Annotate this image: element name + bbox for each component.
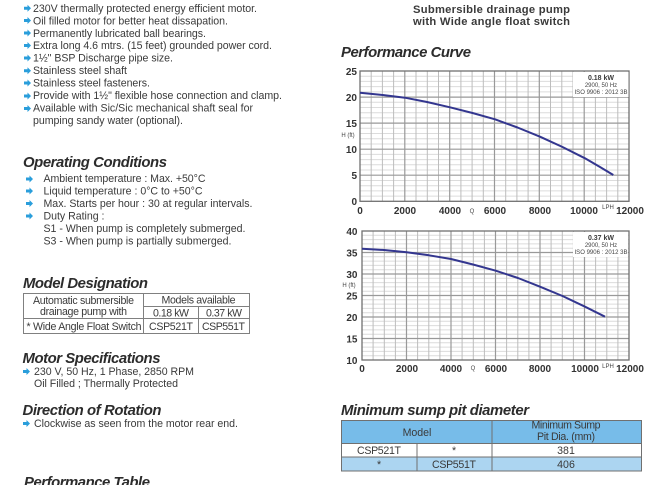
chart: 0.37 kW performance curve: 30 bbox=[346, 270, 358, 281]
chart: 0.18 kW performance curve: 2000 bbox=[394, 206, 417, 217]
feature list: Stainless steel shaft bbox=[33, 65, 127, 77]
minimum sump pit table: * bbox=[377, 459, 381, 471]
operating conditions list: Max. Starts per hour : 30 at regular intervals. bbox=[44, 198, 252, 210]
chart: 0.37 kW performance curve: 20 bbox=[346, 313, 358, 324]
model designation table: CSP551T bbox=[202, 321, 246, 333]
chart: 0.37 kW performance curve: 12000 bbox=[616, 364, 644, 375]
heading: minimum sump pit diameter: Minimum sump pit diameter bbox=[341, 403, 530, 419]
rating box: ISO 9906 : 2012 3B bbox=[574, 90, 628, 96]
direction of rotation text: Clockwise as seen from the motor rear end. bbox=[34, 418, 238, 430]
chart: 0.37 kW performance curve: 25 bbox=[346, 292, 358, 302]
operating conditions list bbox=[26, 173, 252, 248]
chart: 0.18 kW performance curve: 12000 bbox=[616, 206, 644, 217]
feature list: Permanently lubricated ball bearings. bbox=[33, 28, 206, 40]
chart: 0.18 kW performance curve bbox=[341, 67, 644, 217]
chart: 0.37 kW performance curve: 2000 bbox=[396, 364, 419, 375]
chart: 0.18 kW performance curve: 20 bbox=[346, 93, 357, 104]
minimum sump pit table: 406 bbox=[557, 459, 575, 471]
feature list: Available with Sic/Sic mechanical shaft seal for bbox=[33, 102, 253, 114]
chart: 0.18 kW performance curve: 10 bbox=[346, 145, 357, 156]
feature list: 230V thermally protected energy efficient motor. bbox=[33, 3, 257, 15]
model designation table: Models available bbox=[162, 294, 236, 306]
heading: performance curve: Performance Curve bbox=[341, 45, 471, 61]
chart: 0.37 kW performance curve bbox=[342, 227, 644, 375]
chart: 0.37 kW performance curve: 8000 bbox=[529, 364, 552, 375]
rating box: 2900, 50 Hz bbox=[585, 83, 617, 89]
minimum sump pit table: Model bbox=[403, 427, 431, 439]
feature list: Stainless steel fasteners. bbox=[33, 78, 150, 90]
chart: 0.37 kW performance curve: 0 bbox=[359, 364, 365, 375]
operating conditions list: S3 - When pump is partially submerged. bbox=[44, 236, 232, 248]
rating box: 2900, 50 Hz bbox=[585, 243, 617, 249]
operating conditions list: Liquid temperature : 0°C to +50°C bbox=[44, 186, 203, 198]
performance line bbox=[362, 249, 605, 317]
chart: 0.18 kW performance curve: 4000 bbox=[439, 206, 462, 217]
model designation table: Automatic submersible bbox=[33, 295, 134, 307]
feature list: Extra long 4.6 mtrs. (15 feet) grounded power cord. bbox=[33, 40, 272, 52]
chart: 0.18 kW performance curve: 0 bbox=[357, 206, 363, 217]
heading: direction of rotation: Direction of Rotation bbox=[22, 403, 162, 419]
operating conditions list: Duty Rating : bbox=[44, 210, 104, 222]
minimum sump pit table: Minimum Sump bbox=[532, 420, 601, 432]
chart: 0.18 kW performance curve: LPH bbox=[602, 205, 614, 211]
chart: 0.37 kW performance curve: 40 bbox=[346, 227, 358, 238]
chart: 0.37 kW performance curve: 10 bbox=[346, 356, 358, 367]
model designation table: 0.37 kW bbox=[206, 308, 242, 320]
chart: 0.18 kW performance curve: 8000 bbox=[529, 206, 552, 217]
model designation table: 0.18 kW bbox=[153, 308, 189, 320]
model designation table: CSP521T bbox=[149, 321, 194, 333]
chart: 0.18 kW performance curve: H (ft) bbox=[341, 133, 355, 139]
chart: 0.37 kW performance curve: H (ft) bbox=[342, 283, 356, 289]
heading: motor specifications: Motor Specifications bbox=[22, 351, 160, 367]
operating conditions list: Ambient temperature : Max. +50°C bbox=[44, 173, 206, 185]
feature list: pumping sandy water (optional). bbox=[33, 115, 183, 127]
model designation table bbox=[24, 294, 250, 334]
minimum sump pit table: 381 bbox=[557, 445, 575, 457]
rating box: 0.18 kW bbox=[588, 75, 614, 82]
chart: 0.18 kW performance curve: 6000 bbox=[484, 206, 507, 217]
rating box: 0.37 kW bbox=[588, 235, 614, 242]
chart: 0.37 kW performance curve: 4000 bbox=[440, 364, 463, 375]
chart: 0.37 kW performance curve: 6000 bbox=[485, 364, 508, 375]
minimum sump pit table bbox=[341, 420, 642, 471]
feature list: 1½" BSP Discharge pipe size. bbox=[33, 53, 173, 65]
performance line bbox=[360, 93, 613, 175]
motor specifications text: 230 V, 50 Hz, 1 Phase, 2850 RPM bbox=[34, 366, 194, 378]
feature list: Provide with 1½" flexible hose connection and clamp. bbox=[33, 90, 282, 102]
chart: 0.37 kW performance curve: 10000 bbox=[571, 364, 599, 375]
chart: 0.37 kW performance curve: Q bbox=[471, 366, 476, 372]
product title: with Wide angle float switch bbox=[412, 16, 570, 28]
motor specifications text: Oil Filled ; Thermally Protected bbox=[34, 378, 178, 390]
rating box bbox=[573, 72, 628, 97]
heading: model designation: Model Designation bbox=[23, 276, 148, 292]
chart: 0.18 kW performance curve: 5 bbox=[351, 171, 357, 182]
rating box bbox=[573, 232, 628, 257]
model designation table: * Wide Angle Float Switch bbox=[26, 321, 142, 333]
rating box: ISO 9906 : 2012 3B bbox=[574, 250, 628, 256]
chart: 0.37 kW performance curve: 35 bbox=[346, 248, 358, 260]
minimum sump pit table: Pit Dia. (mm) bbox=[537, 431, 595, 443]
chart: 0.18 kW performance curve: 15 bbox=[346, 119, 357, 130]
minimum sump pit table: * bbox=[452, 445, 456, 457]
feature list: Oil filled motor for better heat dissapation. bbox=[33, 15, 228, 27]
minimum sump pit table: CSP551T bbox=[432, 459, 477, 471]
product title: Submersible drainage pump bbox=[413, 4, 570, 16]
chart: 0.18 kW performance curve: Q bbox=[470, 209, 475, 215]
minimum sump pit table: CSP521T bbox=[357, 445, 402, 457]
operating conditions list: S1 - When pump is completely submerged. bbox=[44, 223, 246, 235]
chart: 0.18 kW performance curve: 25 bbox=[346, 67, 357, 78]
chart: 0.18 kW performance curve: 0 bbox=[351, 197, 357, 208]
product title bbox=[412, 4, 570, 28]
motor specifications text bbox=[23, 366, 194, 390]
chart: 0.37 kW performance curve: 15 bbox=[346, 334, 358, 346]
chart: 0.18 kW performance curve: 10000 bbox=[570, 206, 598, 217]
chart: 0.37 kW performance curve: LPH bbox=[602, 364, 614, 370]
model designation table: drainage pump with bbox=[40, 306, 127, 318]
feature list bbox=[24, 3, 282, 127]
heading: operating conditions: Operating Conditions bbox=[23, 155, 167, 171]
